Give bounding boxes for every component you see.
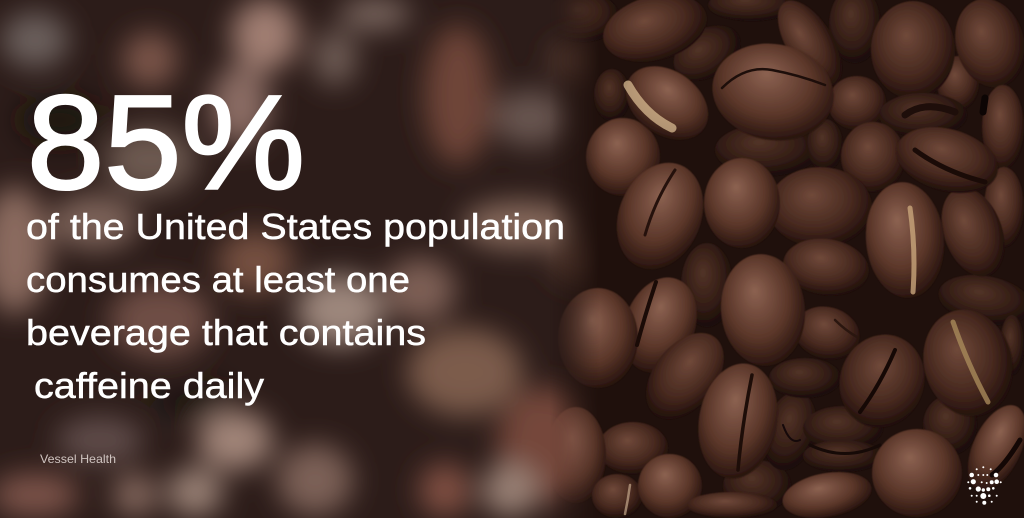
source credit: Vessel Health — [40, 452, 116, 466]
body text: of the United States population — [26, 206, 565, 247]
front beans — [546, 34, 1024, 518]
body text: consumes at least one — [26, 259, 410, 300]
headline statistic: 85% — [27, 68, 305, 218]
body text: caffeine daily — [34, 365, 264, 406]
bean creases and highlights — [625, 69, 1020, 514]
back beans — [547, 0, 1024, 512]
body text: beverage that contains — [26, 312, 426, 353]
logo: dotted heart — [967, 466, 1002, 505]
body text — [26, 206, 565, 406]
coffee beans photo — [540, 0, 1024, 518]
